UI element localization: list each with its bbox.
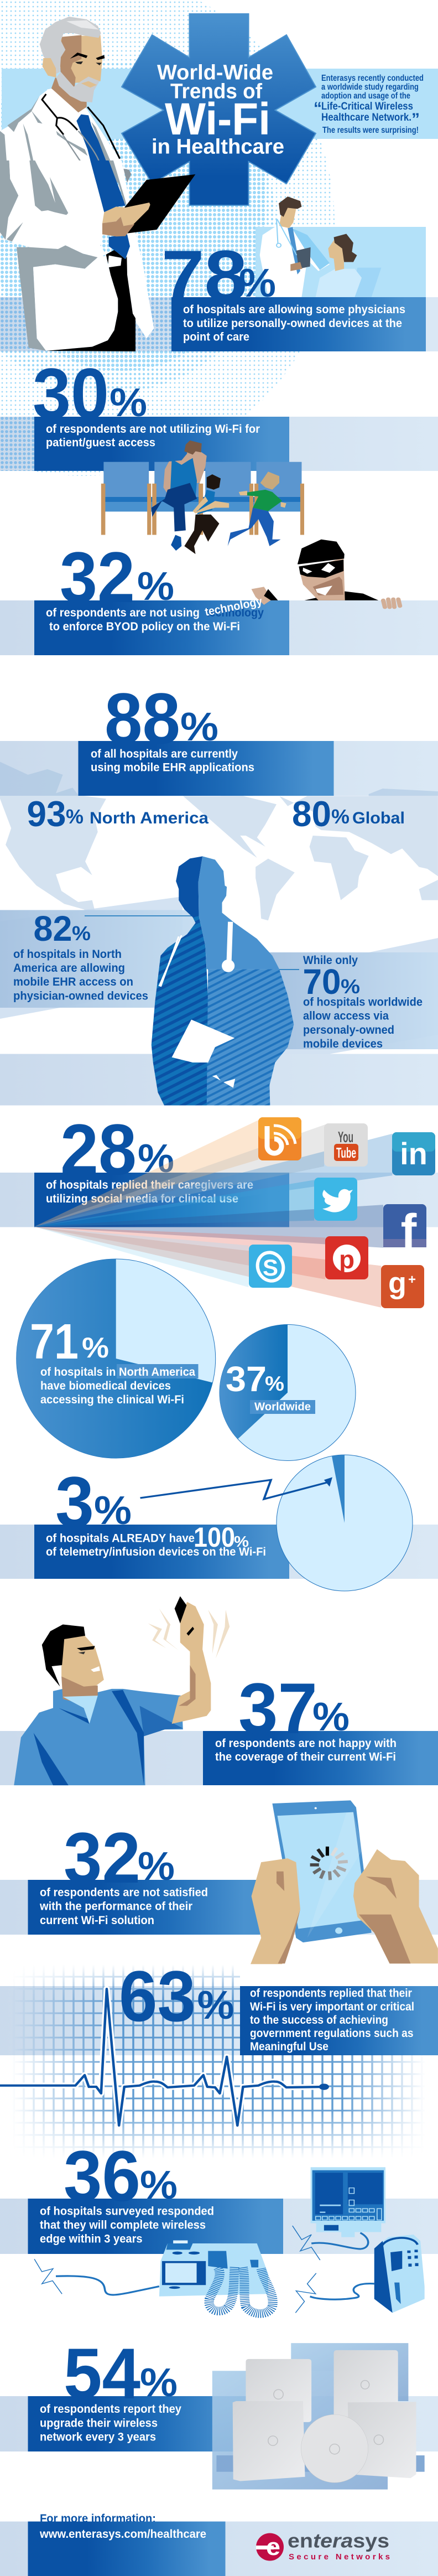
text: 28 percent caption xyxy=(46,1179,253,1205)
illustration: burglar peeking over the band xyxy=(252,540,400,607)
intro text: The results were surprising! xyxy=(322,126,419,135)
social media light fan xyxy=(34,1120,393,1308)
enterasys logo xyxy=(256,2529,390,2562)
stat 93 percent North America: North America xyxy=(90,809,208,827)
stat 70 percent: 70 xyxy=(303,962,341,1002)
stat 93 percent North America: % xyxy=(66,805,84,828)
stat 80 percent Global: 80 xyxy=(292,794,331,834)
band 78 percent panel xyxy=(171,297,426,351)
stat 82 percent: of hospitals in North xyxy=(13,948,122,961)
footer band xyxy=(0,2521,438,2576)
text: 88 percent caption xyxy=(91,748,254,774)
intro text xyxy=(314,74,424,135)
text: 63 percent caption xyxy=(250,1987,414,2053)
stat 32 percent xyxy=(60,537,174,618)
text: 54 percent caption: upgrade their wireless xyxy=(40,2417,158,2429)
band 63 percent xyxy=(0,1986,438,2055)
text: 37 percent caption xyxy=(215,1737,397,1764)
intro text: “ xyxy=(314,99,322,117)
intro text: a worldwide study regarding xyxy=(321,82,419,92)
stat 30 percent: % xyxy=(109,381,147,425)
text: 78 percent caption: point of care xyxy=(183,331,249,343)
world map xyxy=(0,762,438,920)
title: in Healthcare xyxy=(152,135,284,158)
dense dots pattern beside the star xyxy=(166,139,265,297)
icon: facebook xyxy=(383,1204,426,1258)
ecg heartbeat line xyxy=(0,1989,329,2126)
stat 36 percent: 36 xyxy=(64,2136,140,2216)
star of life emblem xyxy=(122,14,316,205)
halftone dot background xyxy=(0,0,335,476)
access point backdrop xyxy=(212,2343,408,2490)
text: 54 percent caption: of respondents report they xyxy=(40,2403,181,2416)
text: 28 percent caption: utilizing social media for clinical use xyxy=(46,1193,238,1205)
text: 54 percent caption xyxy=(40,2403,181,2444)
stat 93 percent North America: 93 xyxy=(27,794,66,834)
text: 32 percent caption: technology xyxy=(204,595,263,619)
stat 36 percent: % xyxy=(140,2163,178,2207)
illustration: tablet with spinner and hands xyxy=(251,1800,438,1964)
intro text: Life-Critical Wireless xyxy=(321,100,413,112)
icon: youtube xyxy=(324,1123,368,1167)
pie chart: 71 percent xyxy=(17,1259,216,1458)
stat 82 percent xyxy=(13,909,148,1003)
illustration: doctor upper body xyxy=(0,90,126,183)
dark dots on the band xyxy=(0,297,171,351)
stat 70 percent: of hospitals worldwide xyxy=(303,996,423,1008)
stat 63 percent: % xyxy=(197,1983,234,2028)
stat 82 percent: physician-owned devices xyxy=(13,989,148,1003)
stat 82 percent: mobile EHR access on xyxy=(13,976,133,988)
icon: blogger xyxy=(258,1117,301,1160)
text: 63 percent caption: Wi-Fi is very important or critical xyxy=(250,2000,414,2013)
enterasys logo: Secure Networks xyxy=(289,2552,390,2562)
text: 32 percent satisfaction caption: with the performance of their xyxy=(39,1900,192,1912)
text: more information heading: For more information: xyxy=(40,2512,156,2525)
title: Trends of xyxy=(170,80,262,103)
stat 82 percent: % xyxy=(72,922,91,945)
icon: linkedin xyxy=(392,1132,435,1175)
text: 3 percent caption: 100 xyxy=(194,1522,235,1553)
text: 63 percent caption: government regulations such as xyxy=(250,2027,414,2040)
enterasys logo: enterasys xyxy=(288,2529,389,2552)
text: 32 percent satisfaction caption: of respondents are not satisfied xyxy=(40,1886,208,1899)
stat 30 percent: 30 xyxy=(33,353,109,434)
text: 30 percent caption: patient/guest access xyxy=(46,436,155,449)
stat 37 percent: 37 xyxy=(238,1668,317,1749)
stat 78 percent xyxy=(161,235,276,316)
text: 88 percent caption: using mobile EHR applications xyxy=(91,761,254,774)
illustration: patient monitor xyxy=(293,2167,385,2260)
text: 32 percent satisfaction caption xyxy=(39,1886,208,1927)
intro text: Healthcare Network. xyxy=(321,111,411,123)
text: 63 percent caption: to the success of achieving xyxy=(250,2014,388,2026)
icon: linkedin: in xyxy=(400,1136,427,1171)
icon: skype: S xyxy=(263,1255,278,1281)
stat 80 percent Global: Global xyxy=(352,809,405,827)
stat 32 percent satisfaction: % xyxy=(138,1844,175,1889)
band 3 percent xyxy=(0,1525,438,1579)
stat 80 percent Global xyxy=(292,794,405,834)
band 88 percent panel xyxy=(79,741,334,796)
intro text: adoption and usage of the xyxy=(321,91,410,101)
pie chart: 71 percent: % xyxy=(82,1332,109,1364)
band 32 percent satisfaction xyxy=(0,1880,438,1935)
icon: skype xyxy=(249,1245,292,1288)
stat 78 percent: 78 xyxy=(161,235,247,316)
stat 70 percent: While only xyxy=(303,954,358,967)
stat 93 percent North America xyxy=(27,794,208,834)
text: 78 percent caption: to utilize personally-owned devices at the xyxy=(183,317,402,330)
band under silhouette xyxy=(0,1054,438,1106)
title: Wi-Fi xyxy=(165,94,270,144)
icon: facebook: f xyxy=(401,1205,417,1258)
illustration: infusion pump xyxy=(295,2235,425,2313)
icon: google plus: + xyxy=(408,1272,416,1287)
illustration: waiting room chairs and family xyxy=(101,440,304,554)
stat 80 percent Global: % xyxy=(331,805,350,828)
stat 82 percent: 82 xyxy=(33,909,72,948)
pie chart: 71 percent: have biomedical devices xyxy=(40,1380,171,1392)
pie chart: 37 percent worldwide: 37 xyxy=(226,1359,267,1399)
text: 78 percent caption: of hospitals are allowing some physicians xyxy=(183,303,405,316)
text: 32 percent satisfaction caption: current Wi-Fi solution xyxy=(40,1914,154,1927)
stat 32 percent: % xyxy=(137,564,174,609)
illustration: small doctor and patient xyxy=(260,196,381,297)
stat 78 percent: % xyxy=(239,261,276,305)
text: 3 percent caption xyxy=(46,1522,266,1558)
text: 3 percent caption: of telemetry/infusion devices on the Wi-Fi xyxy=(46,1546,266,1558)
text: website link: www.enterasys.com/healthcare xyxy=(39,2528,206,2541)
pie chart: 71 percent: accessing the clinical Wi-Fi xyxy=(40,1393,184,1406)
illustration: doctor lower body with tablet xyxy=(0,160,195,351)
stat 70 percent xyxy=(303,954,423,1050)
icon: pinterest: p xyxy=(339,1245,354,1274)
pie chart: 37 percent worldwide: % xyxy=(265,1372,284,1395)
band 54 percent xyxy=(0,2396,438,2451)
text: 63 percent caption: Meaningful Use xyxy=(250,2040,328,2053)
band 78 percent background xyxy=(0,297,438,351)
stat 63 percent xyxy=(119,1956,234,2036)
pie chart: 37 percent worldwide xyxy=(220,1325,356,1461)
text: 78 percent caption xyxy=(183,303,405,343)
text: 36 percent caption: of hospitals surveyed responded xyxy=(40,2205,214,2218)
small doctor panel xyxy=(255,227,426,299)
text: 36 percent caption: edge within 3 years xyxy=(40,2233,143,2246)
illustration: access point devices xyxy=(216,2350,425,2482)
text: 32 percent caption: technology xyxy=(206,607,264,619)
band 30 percent xyxy=(0,417,438,471)
title: World-Wide xyxy=(157,61,273,84)
icon: twitter xyxy=(314,1178,357,1221)
text: 54 percent caption: network every 3 years xyxy=(40,2431,156,2444)
text: 36 percent caption xyxy=(40,2205,214,2246)
stat 70 percent: allow access via xyxy=(303,1009,389,1023)
stat 3 percent: 3 xyxy=(55,1461,94,1542)
intro text: ” xyxy=(411,110,420,128)
text: 36 percent caption: that they will complete wireless xyxy=(40,2219,206,2231)
text: 88 percent caption: of all hospitals are currently xyxy=(91,748,238,760)
arrow to pie wedge xyxy=(140,1477,332,1499)
stat 30 percent xyxy=(33,353,147,434)
stat 28 percent: 28 xyxy=(60,1109,137,1190)
stat 37 percent: % xyxy=(312,1695,350,1739)
icon: youtube: You xyxy=(338,1128,353,1146)
stat 3 percent: % xyxy=(94,1489,132,1533)
leader lines xyxy=(85,916,299,970)
illustration: doctor head xyxy=(40,17,105,120)
icon: google plus: g xyxy=(388,1267,406,1300)
band 37 percent xyxy=(0,1731,438,1785)
band 28 percent xyxy=(0,1173,438,1227)
pie chart: 71 percent: of hospitals in North America xyxy=(40,1366,195,1378)
stat 88 percent: % xyxy=(180,705,218,749)
light blue intro band xyxy=(2,69,438,139)
title xyxy=(152,61,284,158)
band 32 percent xyxy=(0,600,438,655)
stat 70 percent: mobile devices xyxy=(303,1038,383,1050)
stat 28 percent: % xyxy=(138,1137,174,1181)
slanted band left xyxy=(0,896,199,1019)
slanted band right xyxy=(265,938,438,1065)
stat 82 percent: America are allowing xyxy=(13,962,125,975)
illustration: doctor silhouette xyxy=(152,856,294,1106)
text: 32 percent caption: of respondents are not using xyxy=(46,607,200,619)
ecg grid xyxy=(14,1965,426,2158)
stat 32 percent: 32 xyxy=(60,537,135,618)
stat 70 percent: % xyxy=(341,975,360,998)
pie chart: 37 percent worldwide: Worldwide xyxy=(254,1401,311,1413)
text: 3 percent caption: % xyxy=(234,1533,249,1550)
stat 63 percent: 63 xyxy=(119,1956,196,2036)
icon: google plus xyxy=(381,1265,424,1308)
stat 3 percent xyxy=(55,1461,132,1542)
stat 70 percent: personaly-owned xyxy=(303,1024,394,1036)
text: 37 percent caption: the coverage of their current Wi-Fi xyxy=(215,1751,396,1764)
text: 28 percent caption: of hospitals replied their caregivers are xyxy=(46,1179,253,1191)
text: 32 percent caption xyxy=(46,595,264,633)
band 88 percent xyxy=(0,741,438,796)
pie chart: 71 percent: 71 xyxy=(30,1314,79,1370)
dense dots beside the star xyxy=(166,139,265,297)
pie chart: 3 percent xyxy=(277,1455,413,1591)
icon: pinterest xyxy=(325,1236,368,1279)
enterasys logo: e xyxy=(266,2533,280,2561)
text: 63 percent caption: of respondents replied that their xyxy=(250,1987,412,2000)
stat 88 percent: 88 xyxy=(105,678,180,759)
text: 37 percent caption: of respondents are not happy with xyxy=(215,1737,397,1750)
band 36 percent xyxy=(0,2199,438,2254)
icon: youtube: Tube xyxy=(336,1144,356,1161)
stat 54 percent: 54 xyxy=(64,2333,140,2414)
text: 30 percent caption xyxy=(46,423,260,449)
illustration: man holding up phone xyxy=(14,1596,230,1785)
text: 32 percent caption: to enforce BYOD policy on the Wi-Fi xyxy=(49,620,240,633)
text: 30 percent caption: of respondents are not utilizing Wi-Fi for xyxy=(46,423,260,436)
illustration: defibrillator xyxy=(34,2241,273,2314)
text: 3 percent caption: of hospitals ALREADY have xyxy=(46,1532,195,1545)
stat 54 percent: % xyxy=(140,2361,178,2405)
stat 32 percent satisfaction: 32 xyxy=(64,1817,140,1898)
